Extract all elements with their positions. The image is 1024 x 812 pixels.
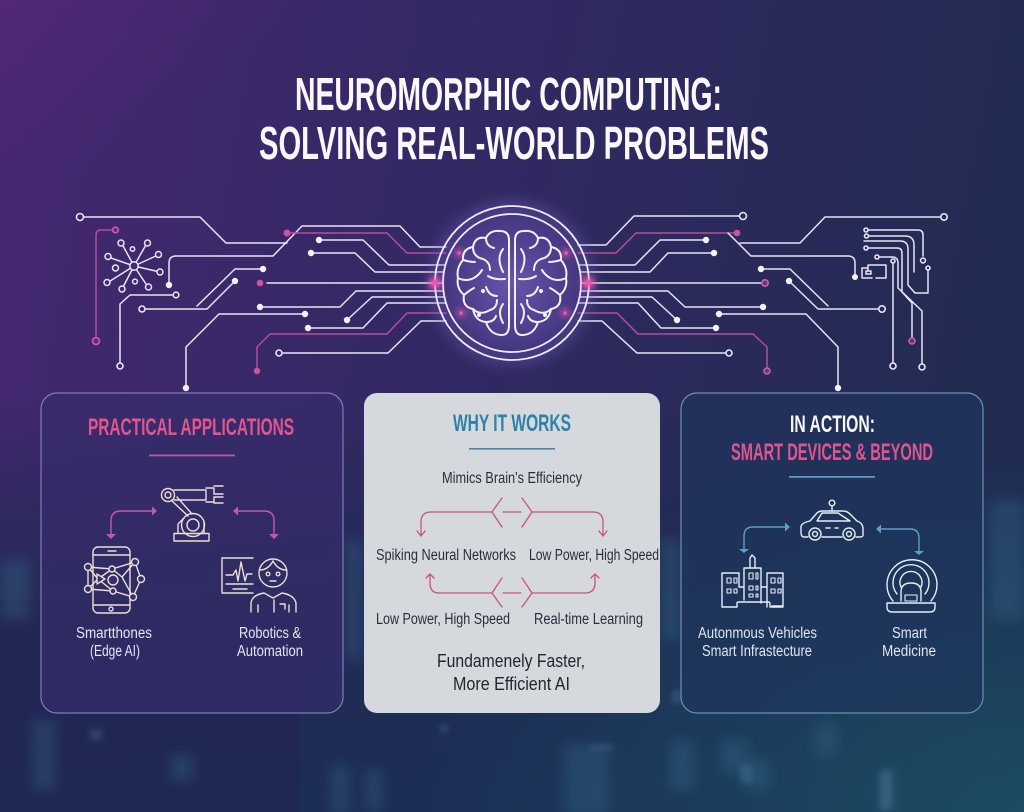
icon: robot arm (162, 486, 223, 541)
label: smartphones: (Edge AI) (90, 643, 140, 660)
text: conclusion: Fundamenely Faster, (437, 650, 585, 671)
icon: autonomous car (801, 500, 863, 540)
panel: why it works (364, 393, 660, 713)
arrow: smartphone to robot (106, 506, 157, 539)
text: mimics: Mimics Brain's Efficiency (442, 470, 582, 487)
text: low power high speed: Low Power, High Speed (376, 611, 510, 628)
arrow: car to scanner (876, 524, 924, 555)
icon: MRI scanner (887, 560, 937, 612)
circuit traces: left side (76, 214, 446, 391)
label: vehicles and infrastructure: Autonmous Vehicles (698, 625, 817, 642)
label: smart medicine: Smart (892, 625, 928, 642)
label: robotics: Robotics & (239, 625, 302, 642)
heading: practical applications: PRACTICAL APPLICATIONS (88, 414, 294, 441)
heading: why it works: WHY IT WORKS (453, 410, 571, 437)
label: robotics: Automation (237, 643, 303, 660)
arrow: robot to person (233, 506, 279, 539)
diagram: top bracket arrows (417, 498, 607, 536)
icon: smart buildings (722, 555, 783, 607)
text: low power high speed: Low Power, High Speed (529, 547, 659, 564)
title: NEUROMORPHIC COMPUTING: (295, 68, 722, 120)
title (259, 68, 769, 169)
heading: in action: IN ACTION: (790, 411, 875, 438)
text: conclusion (437, 650, 585, 694)
icon: monitor and person (222, 558, 296, 612)
label: smartphones (76, 625, 152, 660)
label: vehicles and infrastructure: Smart Infrastecture (702, 643, 812, 660)
label: robotics (237, 625, 303, 660)
icon: smartphone with neural network (84, 547, 144, 613)
text: conclusion: More Efficient AI (453, 673, 570, 694)
icon: circuit chip cluster (862, 228, 930, 370)
circuit traces: right side (578, 212, 947, 391)
icon: neuron hub (104, 240, 163, 292)
label: vehicles and infrastructure (698, 625, 817, 660)
label: smartphones: Smartthones (76, 625, 152, 642)
label: smart medicine: Medicine (882, 643, 936, 660)
panel: in action (681, 393, 983, 713)
panel: practical applications (41, 393, 343, 713)
arrow: building to car (739, 522, 790, 553)
label: smart medicine (882, 625, 936, 660)
text: spiking neural networks: Spiking Neural Networks (376, 547, 516, 564)
diagram: bottom bracket arrows (426, 574, 599, 607)
text: real-time learning: Real-time Learning (534, 611, 643, 628)
icon: brain in glowing rings (428, 199, 596, 367)
